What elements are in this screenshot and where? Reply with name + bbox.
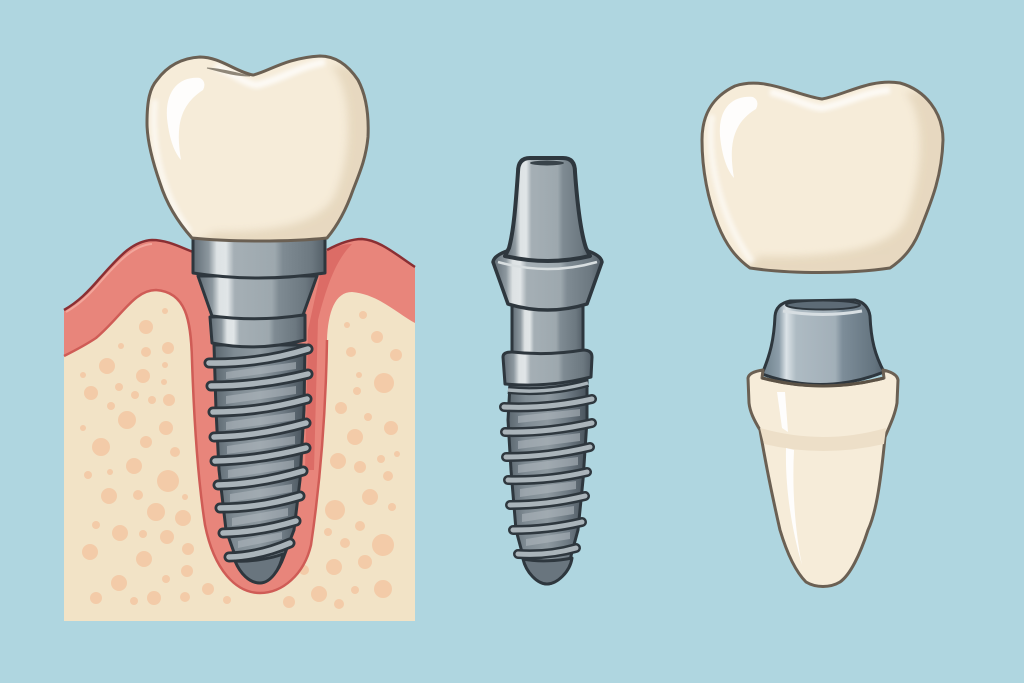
gum tissue xyxy=(64,239,415,593)
lower neck xyxy=(210,315,305,347)
screw body highlights xyxy=(226,362,296,548)
neck xyxy=(512,306,583,354)
lower collar xyxy=(503,350,592,385)
implant screw in jaw xyxy=(193,238,325,583)
panel: implant placed in jaw cross-section xyxy=(64,56,415,621)
bone block xyxy=(64,265,415,621)
screw tip xyxy=(235,554,283,583)
thread ring under collar xyxy=(508,383,588,391)
top collar xyxy=(193,238,325,278)
screw body xyxy=(508,380,587,584)
gum wall shadow right xyxy=(305,244,352,470)
screw threads xyxy=(504,399,592,554)
crown outline xyxy=(147,56,368,241)
gum top outline xyxy=(64,239,415,310)
abutment on base xyxy=(762,300,884,385)
abutment top opening xyxy=(530,160,564,166)
crown on implant xyxy=(147,56,375,245)
bone pores xyxy=(80,308,402,609)
abutment rim highlight xyxy=(783,311,862,314)
gum inner edge shading xyxy=(64,290,327,593)
base collar shading xyxy=(760,428,886,451)
panel: standalone implant and abutment xyxy=(493,158,602,584)
collar rim highlight xyxy=(498,262,597,269)
wide abutment collar xyxy=(493,250,602,310)
crown outline xyxy=(702,82,943,272)
base rim xyxy=(762,378,884,386)
screw tip xyxy=(523,558,572,584)
abutment post xyxy=(505,158,590,261)
screw body highlights xyxy=(518,409,580,546)
occlusal shadow xyxy=(207,68,250,76)
abutment recess xyxy=(786,300,860,310)
gum highlight left xyxy=(66,244,152,312)
separate crown xyxy=(702,82,950,280)
crown soft shading xyxy=(711,90,950,280)
crown highlight xyxy=(720,97,757,178)
crown soft shading xyxy=(154,62,375,245)
screw body xyxy=(214,345,305,583)
tapered collar xyxy=(198,276,317,319)
base highlight upper xyxy=(777,392,788,432)
screw threads xyxy=(209,349,308,557)
base highlight lower xyxy=(786,448,802,565)
ivory base xyxy=(748,370,898,586)
thread ring highlight xyxy=(508,383,588,391)
panel: separate crown and abutment xyxy=(702,82,950,586)
crown highlight xyxy=(167,78,204,160)
